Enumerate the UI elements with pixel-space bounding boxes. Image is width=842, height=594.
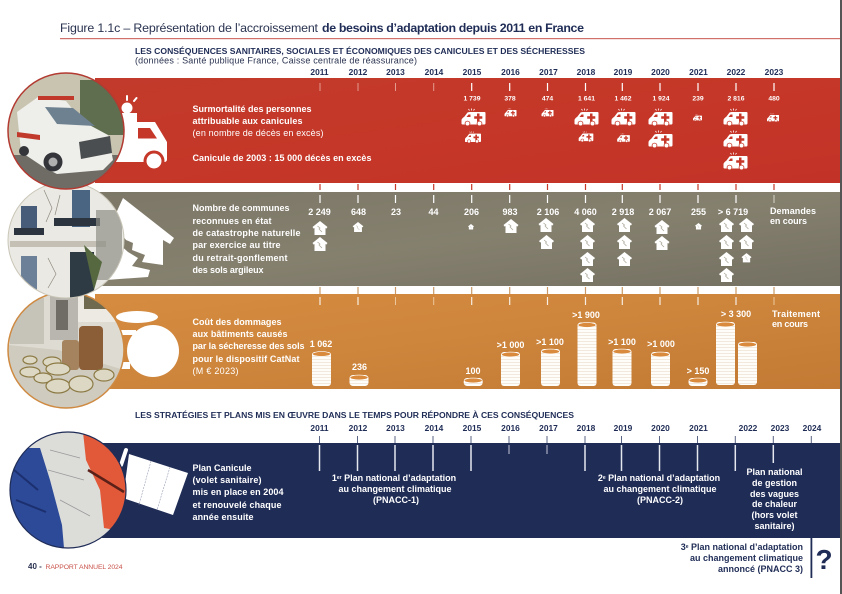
text: PNACC-1 xyxy=(332,473,456,505)
year axis: strategies: 2013 xyxy=(386,423,405,433)
text: PNACC 3: annoncé (PNACC 3) xyxy=(718,564,803,574)
year axis: consequences: 2014 xyxy=(425,67,444,77)
values: costs: 1 062 xyxy=(310,339,332,349)
year axis: strategies: 2015 xyxy=(463,423,482,433)
year axis: consequences: 2021 xyxy=(689,67,708,77)
note: processing: Traitement xyxy=(772,309,820,319)
panel: costs xyxy=(95,294,840,389)
heading: consequences: LES CONSÉQUENCES SANITAIRES, SOCIALES ET ÉCONOMIQUES DES CANICULES ET DES SÉCHERESSES xyxy=(135,46,585,56)
text: PNACC-1: (PNACC-1) xyxy=(373,495,419,505)
footer xyxy=(28,562,123,571)
photo: cracked building xyxy=(8,182,124,298)
icon: cracked house xyxy=(106,198,174,280)
text: heatwave plan: (hors volet xyxy=(751,510,798,520)
year axis: strategies: 2024 xyxy=(803,423,822,433)
text: communes: reconnues en état xyxy=(192,216,272,226)
text: mortality: (en nombre de décès en excès) xyxy=(192,128,324,138)
text: costs xyxy=(192,317,304,376)
year axis: strategies: 2016 xyxy=(501,423,520,433)
text: communes: Nombre de communes xyxy=(192,203,290,213)
note: processing xyxy=(772,309,820,329)
values: costs: 100 xyxy=(465,366,481,376)
text: heatwave plan: de gestion xyxy=(752,478,797,488)
text: PNACC-1: 1 xyxy=(332,473,337,483)
year axis: strategies: 2022 xyxy=(739,423,758,433)
values: communes: 2 249 xyxy=(308,207,331,217)
title: Figure 1.1c – Représentation de l’accroissement xyxy=(60,21,319,35)
panel: communes xyxy=(95,192,840,294)
values: deaths: 1 462 xyxy=(614,96,632,102)
values: costs: >1 100 xyxy=(536,337,564,347)
year axis: consequences: 2018 xyxy=(577,67,596,77)
year axis: consequences: 2013 xyxy=(386,67,405,77)
heading: consequences: (données : Santé publique France, Caisse centrale de réassurance) xyxy=(135,56,417,66)
values: costs: > 3 300 xyxy=(721,309,751,319)
year axis: strategies: 2021 xyxy=(689,423,708,433)
text: PNACC-2: Plan national d’adaptation xyxy=(606,473,720,483)
values: costs: >1 000 xyxy=(497,340,524,350)
year axis: consequences: 2015 xyxy=(463,67,482,77)
year axis: strategies: 2014 xyxy=(425,423,444,433)
chart: coin stacks xyxy=(312,322,757,386)
icon: plan document xyxy=(121,450,188,515)
note: pending requests: en cours xyxy=(770,216,807,226)
values: communes: 983 xyxy=(502,207,518,217)
values: communes: 4 060 xyxy=(574,207,597,217)
ring: building photo xyxy=(8,182,124,298)
title xyxy=(60,21,840,39)
values: communes: > 6 719 xyxy=(718,207,748,217)
year axis: consequences xyxy=(310,67,784,77)
text: PNACC-1: au changement climatique xyxy=(338,484,452,494)
text: PNACC 3: e xyxy=(686,544,689,550)
note: pending requests: Demandes xyxy=(770,206,816,216)
text: PNACC-2: e xyxy=(603,475,606,481)
values: costs: 236 xyxy=(352,362,367,372)
year axis: strategies: 2012 xyxy=(349,423,368,433)
values: deaths: 239 xyxy=(692,96,704,102)
text: PNACC-2: 2 xyxy=(598,473,603,483)
text: mortality: Surmortalité des personnes xyxy=(192,104,312,114)
values: deaths: 1 739 xyxy=(463,96,481,102)
page edge xyxy=(840,0,842,594)
icon: large ambulance xyxy=(112,96,167,172)
year axis: consequences: 2016 xyxy=(501,67,520,77)
text: costs: par la sécheresse des sols xyxy=(192,341,304,351)
text: PNACC-1: er xyxy=(337,475,342,481)
note: pending requests xyxy=(770,206,816,226)
text: costs: pour le dispositif CatNat xyxy=(192,354,300,364)
text: communes xyxy=(192,203,300,275)
ring: ambulance photo xyxy=(8,73,124,189)
year axis: consequences: 2012 xyxy=(349,67,368,77)
values: deaths xyxy=(463,96,780,102)
text: PNACC 3: Plan national d’adaptation xyxy=(688,542,803,552)
year axis: strategies: 2023 xyxy=(771,423,790,433)
text: heatwave plan: Plan national xyxy=(746,467,803,477)
year axis: strategies: 2019 xyxy=(614,423,633,433)
marker: 2024 question: ? xyxy=(815,544,833,575)
values: communes xyxy=(308,207,748,217)
text: heatwave plan: des vagues xyxy=(750,489,799,499)
values: deaths: 1 641 xyxy=(578,96,595,102)
year axis: consequences: 2011 xyxy=(310,67,329,77)
text: communes: de catastrophe naturelle xyxy=(192,228,300,238)
values: deaths: 378 xyxy=(504,96,516,102)
text: Plan Canicule: et renouvelé chaque xyxy=(192,500,282,510)
text: mortality xyxy=(192,104,372,163)
values: deaths: 474 xyxy=(542,96,553,102)
values: communes: 2 106 xyxy=(537,207,559,217)
text: mortality: attribuable aux canicules xyxy=(192,116,302,126)
year axis: consequences: 2022 xyxy=(727,67,746,77)
text: communes: du retrait-gonflement xyxy=(192,253,288,263)
text: heatwave plan: de chaleur xyxy=(752,499,797,509)
text: communes: par exercice au titre xyxy=(192,240,280,250)
ring: flag photo xyxy=(10,432,126,548)
text: PNACC-2 xyxy=(598,473,720,505)
values: costs: >1 000 xyxy=(647,339,675,349)
note: processing: en cours xyxy=(772,319,808,329)
text: PNACC 3: 3 xyxy=(681,542,686,552)
year axis: strategies: 2018 xyxy=(577,423,596,433)
text: PNACC-1: Plan national d’adaptation xyxy=(342,473,456,483)
text: communes: des sols argileux xyxy=(192,265,264,275)
text: Plan Canicule xyxy=(192,463,284,522)
heading: consequences xyxy=(135,46,585,66)
text: PNACC 3 xyxy=(681,542,803,574)
heading: strategies: LES STRATÉGIES ET PLANS MIS EN ŒUVRE DANS LE TEMPS POUR RÉPONDRE À CES CONSÉQUENCES xyxy=(135,410,574,420)
text: costs: (M € 2023) xyxy=(192,366,238,376)
values: communes: 23 xyxy=(391,207,401,217)
year axis: consequences: 2019 xyxy=(614,67,633,77)
values: costs: >1 900 xyxy=(572,310,600,320)
values: costs: > 150 xyxy=(687,366,709,376)
footer: RAPPORT ANNUEL 2024 xyxy=(46,564,123,571)
values: deaths: 1 924 xyxy=(652,96,670,102)
marker: 2024 question xyxy=(810,538,833,578)
text: heatwave plan: sanitaire) xyxy=(754,521,795,531)
title: de besoins d’adaptation depuis 2011 en France xyxy=(322,21,584,35)
panel: plans xyxy=(100,443,840,538)
values: communes: 2 067 xyxy=(649,207,671,217)
photo: ambulance xyxy=(8,73,124,190)
text: Plan Canicule: (volet sanitaire) xyxy=(192,475,262,485)
text: heatwave plan xyxy=(746,467,803,531)
photo: French flag xyxy=(10,432,126,548)
year axis: strategies: 2011 xyxy=(310,423,329,433)
text: Plan Canicule: année ensuite xyxy=(192,512,254,522)
text: PNACC-2: au changement climatique xyxy=(603,484,717,494)
values: deaths: 2 816 xyxy=(727,96,745,102)
values: deaths: 480 xyxy=(768,96,780,102)
year axis: consequences: 2020 xyxy=(651,67,670,77)
panel: heat mortality xyxy=(95,78,840,190)
text: costs: Coût des dommages xyxy=(192,317,282,327)
year axis: strategies: 2020 xyxy=(651,423,670,433)
photo: coins xyxy=(8,292,124,408)
text: Plan Canicule: mis en place en 2004 xyxy=(192,487,284,497)
values: communes: 206 xyxy=(464,207,479,217)
text: PNACC-2: (PNACC-2) xyxy=(637,495,683,505)
values: communes: 648 xyxy=(351,207,366,217)
text: mortality: Canicule de 2003 : 15 000 décès en excès xyxy=(192,153,372,163)
footer: 40 - xyxy=(28,562,42,571)
values: costs: >1 100 xyxy=(608,337,636,347)
year axis: consequences: 2023 xyxy=(765,67,784,77)
year axis: strategies xyxy=(310,423,822,443)
text: PNACC 3: au changement climatique xyxy=(690,553,803,563)
icons: ambulances per year xyxy=(462,108,779,170)
text: Plan Canicule: Plan Canicule xyxy=(192,463,252,473)
year axis: strategies: 2017 xyxy=(539,423,558,433)
year axis: consequences: 2017 xyxy=(539,67,558,77)
text: costs: aux bâtiments causés xyxy=(192,329,288,339)
values: costs xyxy=(310,309,751,376)
ring: coins photo xyxy=(8,292,124,408)
values: communes: 255 xyxy=(691,207,706,217)
values: communes: 44 xyxy=(428,207,439,217)
icons: houses per year xyxy=(312,218,754,282)
values: communes: 2 918 xyxy=(612,207,634,217)
icon: large coins xyxy=(112,311,179,377)
